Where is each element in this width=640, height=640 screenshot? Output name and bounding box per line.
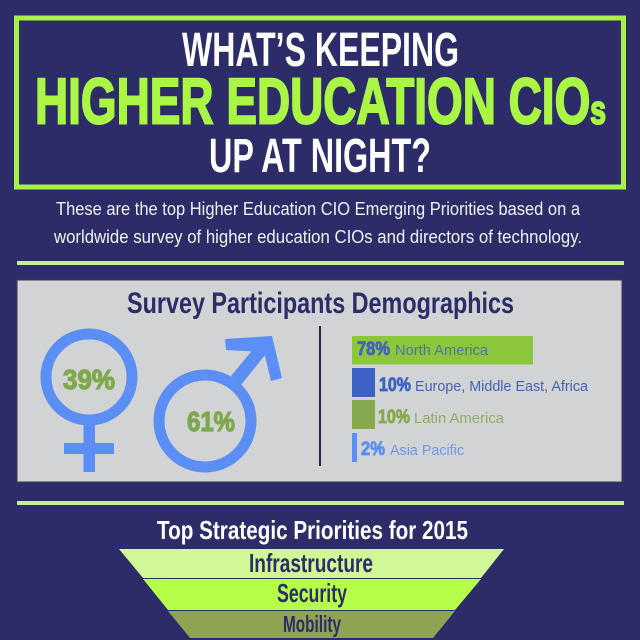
bar: Asia Pacific 2% [352,433,464,462]
bar: Latin America 10%: 10% [378,407,410,428]
bar: North America 78% [352,336,533,364]
bar: North America 78%: North America [395,342,489,359]
panel heading: Survey Participants Demographics [127,287,514,320]
heading: top strategic priorities: Top Strategic Priorities for 2015 [157,515,468,545]
bar: Latin America 10%: Latin America [414,410,505,427]
funnel chart [119,548,504,638]
intro text: worldwide survey of higher education CIOs and directors of technology. [53,227,582,247]
icon: male symbol 61%: 61% [187,406,235,437]
bar: Asia Pacific 2%: 2% [361,439,385,460]
bar: Europe, Middle East, Africa 10%: 10% [379,375,411,396]
title line 1: WHAT’S KEEPING [182,24,459,77]
intro text [53,199,582,247]
funnel tier: Mobility [168,611,455,638]
funnel tier: Infrastructure: Infrastructure [249,548,373,578]
bar: Europe, Middle East, Africa 10%: Europe, Middle East, Africa [415,378,589,395]
funnel tier: Security: Security [277,578,347,608]
icon: female symbol 39%: 39% [63,364,115,395]
bar: Asia Pacific 2%: Asia Pacific [390,442,464,459]
bar: Europe, Middle East, Africa 10% [352,368,589,397]
funnel tier: Security [143,578,481,610]
bar: Latin America 10% [352,400,505,429]
title line 3: UP AT NIGHT? [209,130,431,183]
funnel tier: Mobility: Mobility [283,611,341,637]
title box [16,18,624,187]
bar: North America 78%: 78% [357,339,390,360]
intro text: These are the top Higher Education CIO Emerging Priorities based on a [56,199,581,219]
icon: male symbol 61% [159,336,282,467]
icon: female symbol 39% [46,334,132,472]
funnel tier: Infrastructure [119,548,504,578]
panel: survey demographics [17,280,622,482]
